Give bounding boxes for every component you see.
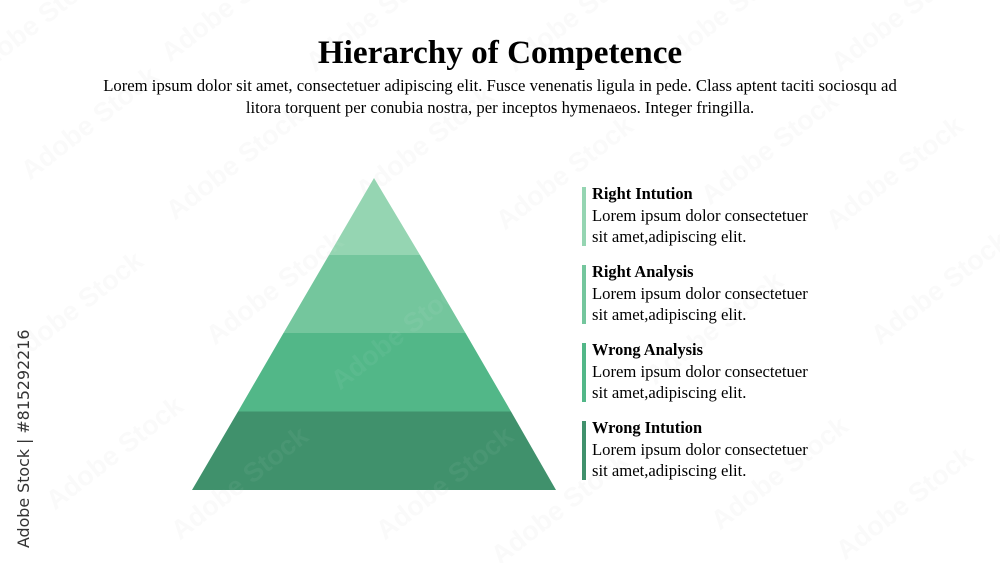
subtitle text block: Lorem ipsum dolor sit amet, consectetuer adipiscing elit. Fusce venenatis ligula in pede. Class aptent taciti sociosqu ad bbox=[103, 76, 897, 95]
stock watermark pattern: Adobe Stock bbox=[830, 440, 979, 563]
watermark over pyramid: Adobe Stock bbox=[165, 420, 314, 546]
legend item: wrong intuition bbox=[582, 418, 808, 480]
legend text bbox=[592, 362, 808, 402]
stock credit, vertical: Adobe Stock | #815292216 bbox=[14, 330, 33, 548]
legend heading: Right Intution bbox=[592, 184, 693, 203]
stock watermark pattern: Adobe Stock bbox=[40, 390, 189, 516]
pyramid tier: right intuition bbox=[329, 178, 420, 255]
legend text bbox=[592, 284, 808, 324]
stock watermark pattern: Adobe Stock bbox=[820, 110, 969, 236]
subtitle text block: litora torquent per conubia nostra, per inceptos hymenaeos. Integer fringilla. bbox=[246, 98, 754, 116]
pyramid tier: wrong analysis bbox=[238, 333, 511, 412]
stock watermark pattern: Adobe Stock bbox=[705, 410, 854, 536]
legend text: sit amet,adipiscing elit. bbox=[592, 461, 746, 480]
stock watermark pattern: Adobe Stock bbox=[200, 225, 349, 351]
stock watermark pattern: Adobe Stock bbox=[160, 100, 309, 226]
legend text: Lorem ipsum dolor consectetuer bbox=[592, 440, 808, 458]
watermark over pyramid bbox=[165, 225, 519, 546]
legend text bbox=[592, 206, 808, 246]
stock watermark pattern: Adobe Stock bbox=[695, 85, 844, 211]
legend heading: Wrong Intution bbox=[592, 418, 702, 437]
stock watermark pattern: Adobe Stock bbox=[0, 245, 149, 371]
legend text: sit amet,adipiscing elit. bbox=[592, 227, 746, 246]
legend item: right intuition bbox=[582, 184, 808, 246]
legend text: sit amet,adipiscing elit. bbox=[592, 305, 746, 324]
legend text: Lorem ipsum dolor consectetuer bbox=[592, 206, 808, 224]
legend text: Lorem ipsum dolor consectetuer bbox=[592, 362, 808, 380]
stock watermark pattern: Adobe Stock bbox=[350, 80, 499, 206]
stock watermark pattern: Adobe Stock bbox=[165, 420, 314, 546]
pyramid tier: right analysis bbox=[284, 255, 466, 333]
legend item: wrong analysis bbox=[582, 340, 808, 402]
stock watermark pattern: Adobe Stock bbox=[370, 420, 519, 546]
watermark over pyramid: Adobe Stock bbox=[200, 225, 349, 351]
legend bar bbox=[582, 343, 586, 402]
watermark over pyramid: Adobe Stock bbox=[325, 270, 474, 396]
watermark over pyramid: Adobe Stock bbox=[370, 420, 519, 546]
pyramid tier: wrong intuition bbox=[192, 412, 556, 490]
stock watermark pattern: Adobe Stock bbox=[640, 265, 789, 391]
legend text: sit amet,adipiscing elit. bbox=[592, 383, 746, 402]
legend bar bbox=[582, 421, 586, 480]
legend item: right analysis bbox=[582, 262, 808, 324]
title: Hierarchy of Competence bbox=[318, 34, 682, 71]
stock watermark pattern: Adobe Stock bbox=[15, 60, 164, 186]
legend bar bbox=[582, 265, 586, 324]
subtitle text block bbox=[103, 76, 897, 116]
stock watermark pattern: Adobe Stock bbox=[490, 110, 639, 236]
legend bar bbox=[582, 187, 586, 246]
legend text bbox=[592, 440, 808, 480]
legend heading: Right Analysis bbox=[592, 262, 694, 281]
legend heading: Wrong Analysis bbox=[592, 340, 703, 359]
legend text: Lorem ipsum dolor consectetuer bbox=[592, 284, 808, 302]
